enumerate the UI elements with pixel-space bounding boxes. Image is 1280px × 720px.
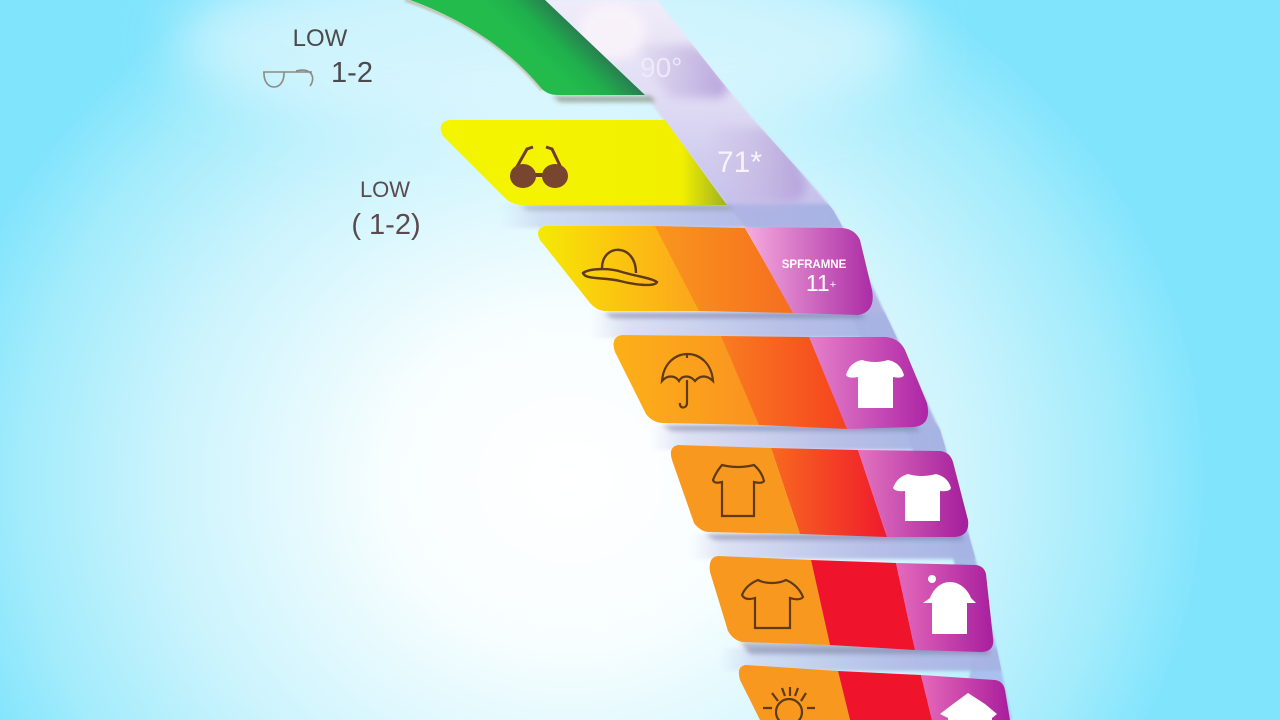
segment 5: red	[671, 445, 968, 540]
low label with glasses	[263, 25, 373, 89]
purple blob behind 90	[640, 45, 728, 98]
segment 3: orange	[538, 226, 873, 318]
icon: sun hat	[583, 250, 657, 285]
icon: white shirt with dot	[923, 575, 976, 634]
segment 4: orange-red	[614, 335, 928, 431]
icon: outline t-shirt	[713, 465, 764, 516]
purple blob behind 71	[730, 126, 810, 202]
second low label: LOW	[360, 177, 410, 202]
text: 1-2: 1-2	[331, 57, 373, 89]
text: LOW: LOW	[293, 25, 348, 52]
icon: outline glasses	[263, 70, 313, 87]
second low label	[351, 177, 421, 241]
text: (1-2): ( 1-2)	[351, 209, 421, 241]
icon: umbrella	[662, 353, 713, 408]
soft glow behind the top of the arc	[175, 0, 915, 135]
text: 11 value: +	[830, 279, 836, 291]
segment 2: yellow	[441, 120, 733, 210]
icon: white shirt	[846, 360, 904, 408]
text: 11 value: 11	[806, 270, 830, 296]
icon: white shirt	[893, 474, 951, 521]
value: 71: 71*	[717, 146, 762, 179]
icon: sun	[763, 687, 815, 720]
icon: white house	[940, 693, 997, 720]
purple arc band	[500, 0, 1012, 720]
segment 6: red	[710, 556, 993, 654]
icon: sunglasses	[510, 147, 568, 188]
segment 1: green	[405, 0, 656, 102]
icon: outline t-shirt	[742, 580, 803, 628]
band body	[545, 0, 1012, 720]
text: spf label: SPFRAMNE	[782, 259, 847, 271]
white haze at the top of the band	[578, 4, 646, 60]
value: 90 degrees: 90°	[640, 52, 682, 83]
clipped purple blobs	[640, 45, 806, 202]
band strips in the gaps between segments	[500, 204, 1010, 671]
segment 7: red bottom	[739, 665, 1010, 720]
